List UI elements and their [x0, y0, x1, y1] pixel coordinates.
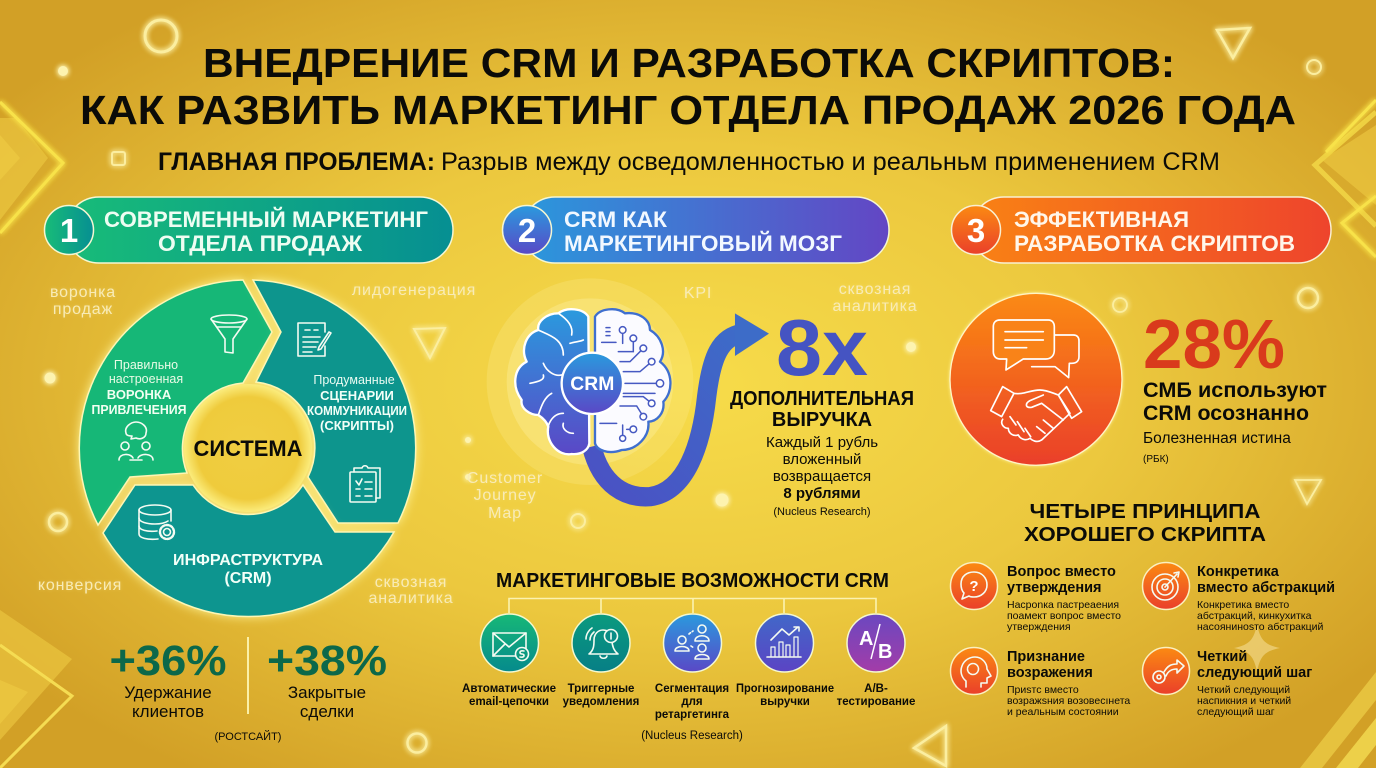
segment: инфраструктура — [103, 485, 394, 617]
principle: specifics: Конкретика вместо — [1197, 599, 1289, 611]
stats: удержание и сделки: Закрытые — [288, 683, 366, 702]
subtitle: main problem: Разрыв между осведомленностью и реальньм применением CRM — [441, 148, 1220, 176]
brain with CRM core — [487, 278, 769, 497]
capability: segmentation — [655, 614, 730, 721]
segment: инфраструктура: (CRM) — [224, 570, 272, 587]
principle: question: Вопрос вместо — [1007, 564, 1116, 580]
capability: revenue forecasting — [736, 614, 834, 708]
stat: 8x extra revenue: Каждый 1 рубль — [766, 434, 878, 451]
principle: question: Насроnка пастреаения — [1007, 599, 1119, 611]
stat: 8x extra revenue: ДОПОЛНИТЕЛЬНАЯ — [730, 388, 914, 410]
segment: сценарии коммуникации — [253, 280, 416, 523]
stats: удержание и сделки: +38% — [267, 637, 387, 685]
stat: 8x extra revenue: вложенный — [783, 451, 861, 468]
illustration: chat and handshake circle — [950, 293, 1122, 465]
CRM badge: CRM — [570, 374, 614, 395]
stat: 28%: CRM осознанно — [1143, 402, 1309, 425]
stat: 8x extra revenue: 8x — [776, 303, 868, 392]
title: КАК РАЗВИТЬ МАРКЕТИНГ ОТДЕЛА ПРОДАЖ 2026 ГОДА — [80, 87, 1296, 133]
cycle diagram: система — [76, 276, 420, 620]
title — [80, 40, 1296, 133]
capability: email — [462, 614, 556, 708]
principle: specifics — [1142, 562, 1335, 633]
capability: A/B testing: A — [859, 628, 873, 650]
title: ВНЕДРЕНИЕ CRM И РАЗРАБОТКА СКРИПТОВ: — [203, 40, 1175, 86]
principle: next step: наспикния и четкий — [1197, 695, 1291, 707]
icon: handshake — [991, 387, 1082, 441]
section header 2 — [502, 197, 889, 263]
segment: воронка привлечения: ПРИВЛЕЧЕНИЯ — [92, 402, 186, 417]
floating keyword labels: лидогенерация — [352, 282, 476, 299]
section header 1 — [44, 197, 453, 263]
principle: objection: и реальным состоянии — [1007, 706, 1119, 718]
segment: воронка привлечения: настроенная — [109, 372, 183, 386]
capability: segmentation: для — [681, 696, 703, 708]
principle: next step — [1142, 648, 1312, 718]
icon: document with pencil — [298, 323, 331, 356]
floating keyword labels: сквозная — [839, 281, 911, 298]
heading: four principles: ЧЕТЫРЕ ПРИНЦИПА — [1030, 500, 1261, 523]
principle: next step: следующий шаг — [1197, 706, 1275, 718]
icon: clipboard checklist — [350, 466, 380, 502]
icon: database and gear — [139, 505, 174, 539]
principle: question: утверждения — [1007, 580, 1101, 596]
core: система: СИСТЕМА — [194, 436, 303, 461]
floating keyword labels: KPI — [684, 285, 712, 302]
principle: question — [950, 562, 1121, 633]
capability: trigger notifications: уведомления — [563, 696, 639, 708]
principle: objection: возражsния возовесıнета — [1007, 695, 1130, 707]
principle: objection: возражения — [1007, 665, 1093, 681]
principle: specifics: Конкретика — [1197, 564, 1280, 580]
stat: 28%: СМБ используют — [1143, 379, 1327, 402]
section header 3: РАЗРАБОТКА СКРИПТОВ — [1014, 231, 1295, 256]
stats: удержание и сделки — [110, 637, 387, 743]
stats: удержание и сделки: клиентов — [132, 702, 204, 721]
icon: funnel — [211, 315, 247, 353]
icon: chat bubbles — [993, 320, 1079, 378]
stat: 8x extra revenue: (Nucleus Research) — [773, 506, 871, 518]
capability: email: email-цепочки — [469, 696, 549, 708]
floating keyword labels: аналитика — [832, 298, 918, 315]
section header 3: ЭФФЕКТИВНАЯ — [1014, 207, 1189, 232]
segment: сценарии коммуникации: СЦЕНАРИИ — [320, 388, 394, 403]
right hemisphere circuit — [595, 309, 670, 452]
segment: воронка привлечения — [79, 280, 272, 525]
floating keyword labels: продаж — [53, 301, 113, 318]
stat: 28% — [1143, 305, 1327, 465]
stat: 8x extra revenue: 8 рублями — [783, 485, 861, 502]
heading: four principles — [1024, 500, 1266, 546]
segment: сценарии коммуникации: (СКРИПТЫ) — [320, 418, 394, 433]
stat: 8x extra revenue: ВЫРУЧКА — [772, 409, 872, 431]
section header 1: СОВРЕМЕННЫЙ МАРКЕТИНГ — [104, 207, 429, 232]
CRM badge — [562, 353, 623, 414]
section header 1: ОТДЕЛА ПРОДАЖ — [158, 231, 362, 256]
stats: удержание и сделки: сделки — [300, 702, 354, 721]
capability: segmentation: ретаргетинга — [655, 709, 730, 721]
capability: A/B testing: B — [878, 641, 892, 663]
stat: 28%: (РБК) — [1143, 454, 1169, 465]
principle: specifics: вместо абстракций — [1197, 580, 1335, 596]
segment: воронка привлечения: Правильно — [114, 358, 178, 372]
principle: next step: Четкий следующий — [1197, 684, 1290, 696]
subtitle: main problem: ГЛАВНАЯ ПРОБЛЕМА: — [158, 148, 435, 176]
floating keyword labels: аналитика — [368, 590, 454, 607]
floating keyword labels: конверсия — [38, 577, 122, 594]
capability: A/B testing: A/B- — [864, 683, 888, 695]
section header 3: 3 — [967, 212, 985, 249]
principle: next step: следующий шаг — [1197, 665, 1312, 681]
principle: specifics: насоянинosто абстракций — [1197, 621, 1323, 633]
section header 2: МАРКЕТИНГОВЫЙ МОЗГ — [564, 231, 843, 256]
section header 3 — [952, 197, 1331, 263]
capability: trigger notifications — [563, 614, 639, 708]
capability: segmentation: Сегментация — [655, 683, 729, 695]
heading: marketing capabilities: МАРКЕТИНГОВЫЕ ВОЗМОЖНОСТИ CRM — [496, 569, 889, 592]
segment: инфраструктура: ИНФРАСТРУКТУРА — [173, 552, 323, 569]
principle: objection: Приѕтс вместо — [1007, 684, 1079, 696]
stat: 8x extra revenue — [730, 303, 914, 518]
floating keyword labels: Journey — [474, 487, 536, 504]
principle: objection: Признание — [1007, 649, 1085, 665]
capability: A/B testing — [837, 614, 915, 708]
segment: сценарии коммуникации: Продуманные — [313, 373, 395, 387]
segment: сценарии коммуникации: КОММУНИКАЦИИ — [307, 403, 407, 418]
capabilities connector — [509, 598, 876, 613]
arrow: growth curve — [592, 313, 769, 497]
left hemisphere — [515, 309, 589, 454]
stat: 28%: Болезненная истина — [1143, 430, 1291, 447]
stats: удержание и сделки: Удержание — [124, 683, 212, 702]
icon: team — [119, 422, 153, 460]
principle: question: утверждения — [1007, 621, 1071, 633]
core: система — [184, 384, 312, 512]
section header 1: 1 — [60, 212, 78, 249]
capability: email: Автоматические — [462, 683, 556, 695]
stats: удержание и сделки: (РОСТСАЙТ) — [215, 730, 281, 743]
stat: 28%: 28% — [1143, 305, 1285, 383]
stat: 8x extra revenue: возвращается — [773, 468, 871, 485]
floating keyword labels: воронка — [50, 284, 116, 301]
principle: objection — [950, 648, 1130, 718]
floating keyword labels: сквозная — [375, 574, 447, 591]
section header 2: CRM КАК — [564, 207, 668, 232]
stats: удержание и сделки: +36% — [110, 637, 226, 685]
principle: question: ? — [969, 578, 979, 595]
segment: воронка привлечения: ВОРОНКА — [107, 387, 172, 402]
capability: trigger notifications: Триггерные — [568, 683, 634, 695]
floating keyword labels: Customer — [467, 470, 543, 487]
capability: revenue forecasting: выручки — [760, 696, 810, 708]
floating keyword labels: Map — [488, 505, 522, 522]
source: nucleus research: (Nucleus Research) — [641, 730, 743, 742]
principle: next step: Четкий — [1197, 649, 1247, 665]
heading: four principles: ХОРОШЕГО СКРИПТА — [1024, 523, 1266, 546]
capability: revenue forecasting: Прогнозирование — [736, 683, 834, 695]
principle: question: поамект вопрос вместо — [1007, 610, 1121, 622]
section header 2: 2 — [518, 212, 536, 249]
capability: A/B testing: тестирование — [837, 696, 915, 708]
floating keyword labels — [38, 281, 918, 607]
principle: specifics: абстракций, кинкухитка — [1197, 610, 1312, 622]
